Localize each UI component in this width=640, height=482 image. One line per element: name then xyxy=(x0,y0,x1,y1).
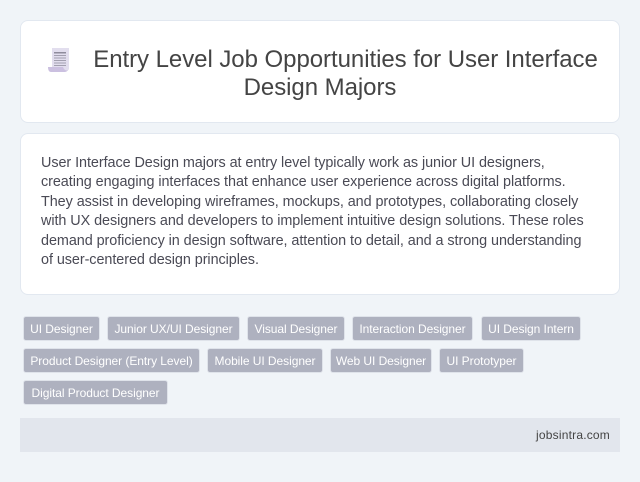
text block: description: They assist in developing wireframes, mockups, and prototypes, collaborating closely xyxy=(41,194,578,210)
title: Design Majors xyxy=(244,74,396,101)
text block: description xyxy=(41,155,584,268)
tag xyxy=(247,316,345,341)
tag list xyxy=(23,316,581,405)
icon: document scroll xyxy=(48,48,69,72)
tag: Visual Designer xyxy=(255,322,337,336)
tag: UI Designer xyxy=(30,322,93,336)
tag xyxy=(23,380,168,405)
tag: Mobile UI Designer xyxy=(215,354,315,368)
tag: UI Design Intern xyxy=(488,322,574,336)
tag xyxy=(352,316,473,341)
panel: header xyxy=(20,20,620,123)
tag xyxy=(330,348,432,373)
text block: description: with UX designers and developers to implement intuitive design solutions. These roles xyxy=(41,213,584,229)
tag xyxy=(439,348,524,373)
tag: Web UI Designer xyxy=(336,354,426,368)
tag: UI Prototyper xyxy=(447,354,516,368)
tag xyxy=(23,316,100,341)
text block: description: User Interface Design majors at entry level typically work as junior UI designers, xyxy=(41,155,545,171)
tag: Junior UX/UI Designer xyxy=(114,322,233,336)
footer source text: jobsintra.com xyxy=(536,428,610,442)
tag xyxy=(207,348,323,373)
title xyxy=(93,46,598,101)
panel: description xyxy=(20,133,620,295)
tag xyxy=(107,316,240,341)
text block: description: creating engaging interfaces that enhance user experience across digital platforms. xyxy=(41,174,566,190)
text block: description: of user-centered design principles. xyxy=(41,252,259,268)
tag xyxy=(23,348,200,373)
text block: description: demand proficiency in design software, attention to detail, and a strong understanding xyxy=(41,233,581,249)
tag: Digital Product Designer xyxy=(32,386,159,400)
footer bar xyxy=(20,418,620,452)
tag xyxy=(481,316,581,341)
tag: Product Designer (Entry Level) xyxy=(30,354,193,368)
title: Entry Level Job Opportunities for User Interface xyxy=(93,46,598,73)
tag: Interaction Designer xyxy=(359,322,466,336)
